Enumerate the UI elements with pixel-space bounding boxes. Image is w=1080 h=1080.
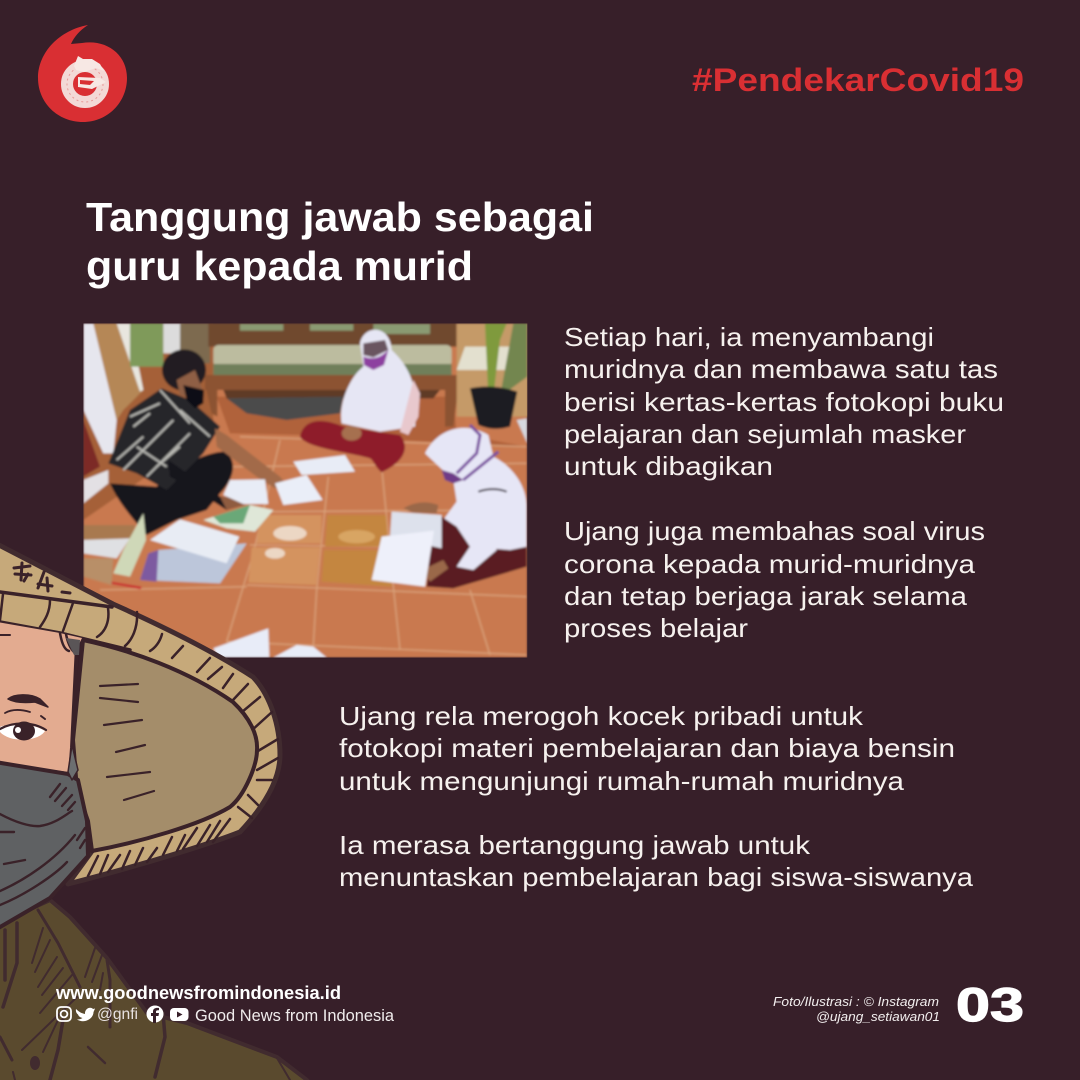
paragraph 2: Ujang juga membahas soal virus <box>564 516 985 546</box>
paragraph 3: untuk mengunjungi rumah-rumah muridnya <box>339 766 905 796</box>
paragraph 2: proses belajar <box>564 613 748 643</box>
logo <box>38 25 127 122</box>
student 2 <box>403 425 527 588</box>
hat brim <box>0 543 280 884</box>
footer contact: www.goodnewsfromindonesia.id <box>55 982 341 1003</box>
paragraph 4 <box>339 830 974 892</box>
paragraph 1: pelajaran dan sejumlah masker <box>564 419 966 449</box>
bench <box>205 323 460 427</box>
paragraph 1: Setiap hari, ia menyambangi <box>564 322 934 352</box>
paragraph 4: Ia merasa bertanggung jawab untuk <box>339 830 811 860</box>
papers <box>112 455 442 658</box>
illustration: masked man with woven hat <box>0 543 320 1080</box>
pillar and plant <box>457 323 528 443</box>
paragraph 3: fotokopi materi pembelajaran dan biaya bensin <box>339 733 955 763</box>
floor tiles <box>100 437 527 655</box>
hat writing <box>14 563 70 593</box>
man <box>108 349 288 535</box>
footer contact <box>55 982 395 1025</box>
photo credit: Foto/Ilustrasi : © Instagram <box>773 994 939 1009</box>
paragraph 3 <box>339 701 955 796</box>
box at left <box>83 525 135 585</box>
photo credit: @ujang_setiawan01 <box>816 1009 940 1024</box>
photo credit <box>773 994 940 1024</box>
face <box>0 622 82 775</box>
hat crown interior <box>73 640 257 851</box>
paragraph 2: corona kepada murid-muridnya <box>564 549 976 579</box>
paragraph 2 <box>564 516 985 643</box>
footer contact: @gnfi <box>97 1006 138 1023</box>
title: Tanggung jawab sebagai <box>86 194 594 240</box>
student 1 <box>300 330 420 472</box>
jacket <box>0 900 320 1080</box>
eye <box>0 724 45 740</box>
photo: teacher with two students on tiled floor <box>83 323 528 658</box>
icon: instagram <box>57 1007 71 1021</box>
icon: youtube <box>170 1008 188 1021</box>
page number: 03 <box>956 978 1024 1031</box>
face mask <box>0 745 88 930</box>
hashtag: #PendekarCovid19 <box>692 62 1024 98</box>
paragraph 2: dan tetap berjaga jarak selama <box>564 581 968 611</box>
footer contact: Good News from Indonesia <box>195 1006 395 1025</box>
title: guru kepada murid <box>86 243 473 289</box>
paragraph 1: muridnya dan membawa satu tas <box>564 354 998 384</box>
icon: twitter <box>76 1008 95 1021</box>
paragraph 1 <box>564 322 1004 481</box>
icon: facebook <box>146 1006 164 1023</box>
paragraph 4: menuntaskan pembelajaran bagi siswa-siswanya <box>339 862 974 892</box>
paragraph 1: berisi kertas-kertas fotokopi buku <box>564 387 1004 417</box>
paragraph 3: Ujang rela merogoh kocek pribadi untuk <box>339 701 864 731</box>
paragraph 1: untuk dibagikan <box>564 451 773 481</box>
crown shading strokes <box>100 684 154 800</box>
title <box>86 194 594 289</box>
